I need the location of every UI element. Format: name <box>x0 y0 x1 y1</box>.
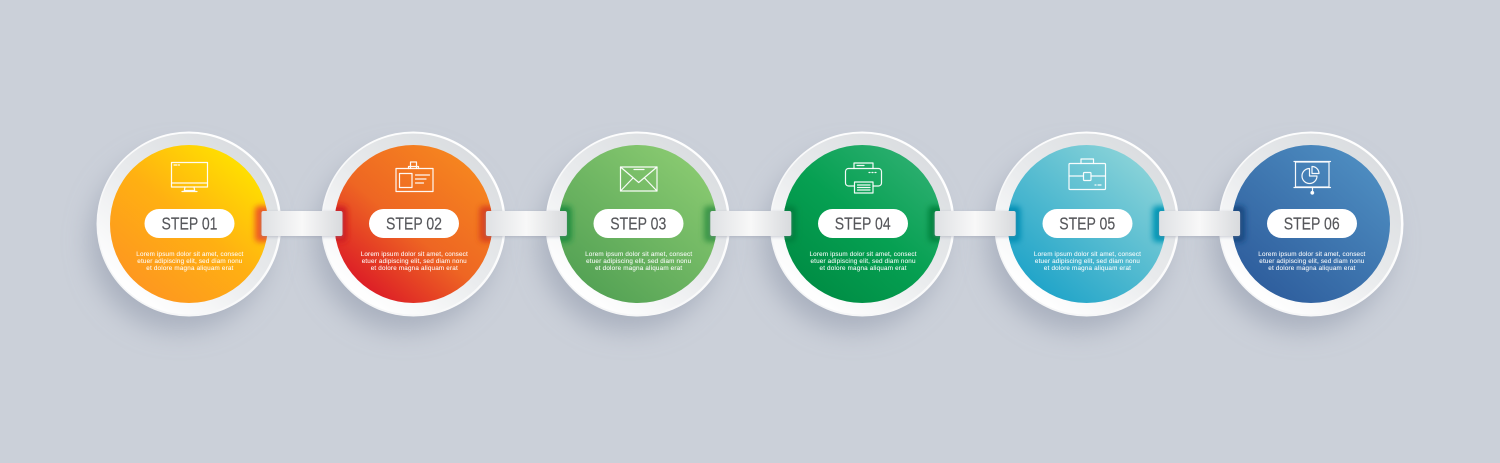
step 4 label pill <box>818 209 908 238</box>
connector 1-2 <box>261 211 342 237</box>
step 1 panel <box>90 132 282 331</box>
step 6 disc <box>1232 145 1390 303</box>
step 6 connector glow <box>1226 206 1245 242</box>
step 6 description: Lorem ipsum dolor sit amet, consect <box>1258 251 1366 258</box>
step 6 ring <box>1218 132 1404 316</box>
step 4 connector glows <box>777 206 944 242</box>
step 3 disc <box>559 145 717 303</box>
step 4 description: etuer adipiscing elit, sed diam nonu <box>810 258 916 265</box>
step 4 description <box>810 251 917 272</box>
step 4 description: et dolore magna aliquam erat <box>820 265 907 272</box>
connector 4-5 <box>934 211 1016 237</box>
icon: briefcase <box>1069 159 1106 190</box>
icon: monitor <box>172 162 208 192</box>
step 6 description: etuer adipiscing elit, sed diam nonu <box>1259 258 1365 265</box>
step 5 description: et dolore magna aliquam erat <box>1044 265 1131 272</box>
icon: envelope <box>620 167 657 191</box>
step 3 label pill <box>594 209 684 238</box>
step 2 description: Lorem ipsum dolor sit amet, consect <box>361 251 468 258</box>
step 2 panel <box>314 132 506 331</box>
step 3 ring <box>545 132 730 316</box>
step 4 ring <box>770 132 955 316</box>
step 4 disc <box>783 145 941 303</box>
icon: printer <box>846 163 882 193</box>
step 1 ring <box>96 132 282 316</box>
step 3 shadow <box>539 151 719 331</box>
step 5 panel <box>988 132 1179 331</box>
step 3 connector glows <box>552 206 720 242</box>
step 2 description <box>361 251 468 272</box>
step 6 panel <box>1212 132 1404 331</box>
icon: id badge <box>396 162 433 192</box>
step 5 connector glows <box>1002 206 1169 242</box>
step 5 disc <box>1008 145 1166 303</box>
step 3 description: etuer adipiscing elit, sed diam nonu <box>586 258 692 265</box>
step 3 panel <box>539 132 730 331</box>
step 2 disc <box>334 145 492 303</box>
step 2 label pill <box>369 209 459 238</box>
step 1 label: STEP 01 <box>162 214 218 234</box>
step 5 description: etuer adipiscing elit, sed diam nonu <box>1035 258 1140 265</box>
step 1 description: et dolore magna aliquam erat <box>146 265 234 272</box>
step 1 description <box>136 251 244 272</box>
step 1 description: etuer adipiscing elit, sed diam nonu <box>137 258 243 265</box>
icon: presentation screen <box>1294 162 1330 194</box>
step 1 disc <box>110 145 268 303</box>
step 3 label: STEP 03 <box>610 214 666 234</box>
step 6 description <box>1258 251 1366 272</box>
step 2 ring <box>321 132 506 316</box>
step 6 shadow <box>1212 151 1392 331</box>
step 6 description: et dolore magna aliquam erat <box>1268 265 1356 272</box>
connector 5-6 <box>1159 211 1240 237</box>
step 4 panel <box>763 132 955 331</box>
step 2 description: etuer adipiscing elit, sed diam nonu <box>362 258 467 265</box>
step 1 description: Lorem ipsum dolor sit amet, consect <box>136 251 244 258</box>
step 6 label: STEP 06 <box>1284 214 1340 234</box>
step 2 connector glows <box>328 206 496 242</box>
step 4 description: Lorem ipsum dolor sit amet, consect <box>810 251 917 258</box>
step 3 description <box>585 251 692 272</box>
step 4 shadow <box>763 151 943 331</box>
step 2 description: et dolore magna aliquam erat <box>371 265 458 272</box>
step 5 label: STEP 05 <box>1059 214 1115 234</box>
step 5 label pill <box>1042 209 1132 238</box>
step 5 description <box>1034 251 1141 272</box>
step 3 description: et dolore magna aliquam erat <box>595 265 682 272</box>
step 2 label: STEP 02 <box>386 214 442 234</box>
step 2 shadow <box>314 151 494 331</box>
step 5 ring <box>994 132 1179 316</box>
step 3 description: Lorem ipsum dolor sit amet, consect <box>585 251 692 258</box>
step 5 shadow <box>988 151 1168 331</box>
step 1 label pill <box>144 209 234 238</box>
step 1 shadow <box>90 151 270 331</box>
step 6 label pill <box>1267 209 1357 238</box>
connector 2-3 <box>485 211 567 237</box>
step 4 label: STEP 04 <box>835 214 891 234</box>
step 5 description: Lorem ipsum dolor sit amet, consect <box>1034 251 1141 258</box>
step 1 connector glow <box>255 206 271 242</box>
connector 3-4 <box>710 211 791 237</box>
